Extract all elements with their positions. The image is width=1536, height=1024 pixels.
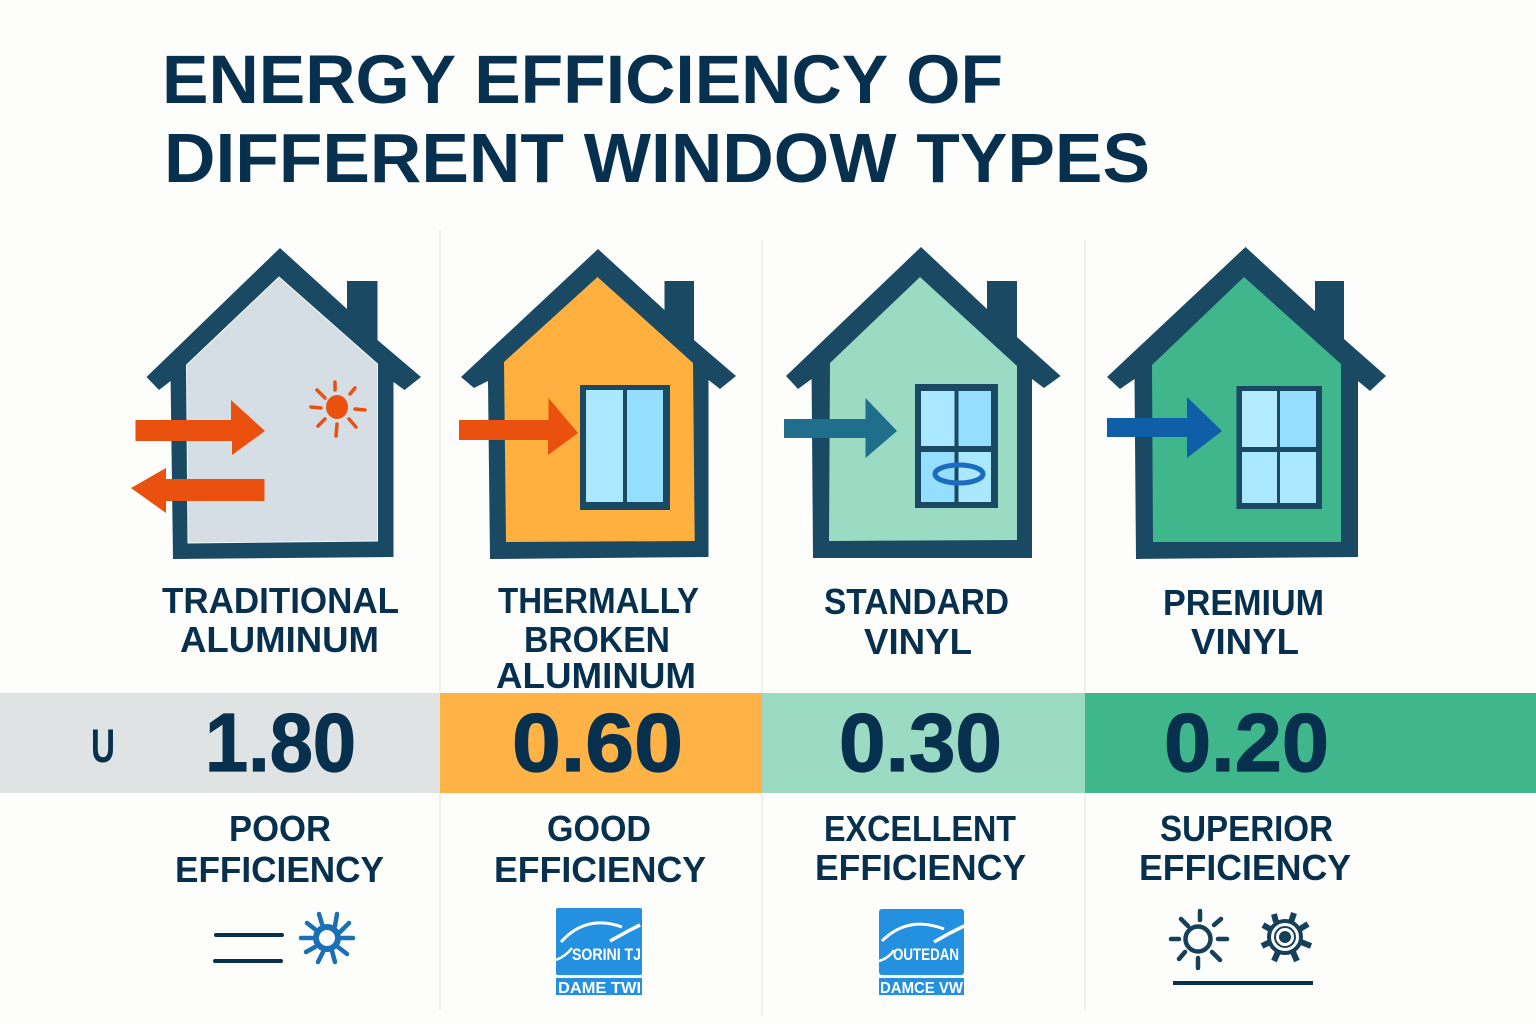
arrow: reduced heat (784, 398, 897, 458)
icon: efficiency badge one: DAME TWI (558, 980, 641, 997)
rating: good efficiency (494, 808, 706, 890)
panel: thermally broken aluminum (459, 249, 736, 559)
label: traditional aluminum: TRADITIONAL (162, 580, 399, 621)
label: traditional aluminum (162, 580, 399, 660)
arrow: heat in (136, 400, 265, 455)
label: thermally broken aluminum (496, 580, 699, 696)
label: premium vinyl (1163, 582, 1324, 662)
window: four pane (1236, 386, 1322, 509)
label: thermally broken aluminum: BROKEN (524, 619, 670, 660)
icon: efficiency badge one: SORINI TJ (572, 945, 641, 964)
rating: excellent efficiency: EFFICIENCY (815, 847, 1026, 888)
icon: blue sun (301, 914, 353, 962)
rating: excellent efficiency: EXCELLENT (824, 808, 1016, 849)
icon: gear sun (1262, 913, 1311, 961)
u label: U (91, 719, 115, 772)
label: standard vinyl: STANDARD (824, 581, 1009, 622)
window: double pane (580, 385, 670, 510)
title: DIFFERENT WINDOW TYPES (164, 119, 1150, 197)
icon: efficiency badge two: OUTEDAN (893, 945, 959, 964)
icon: efficiency badge two: DAMCE VW (880, 980, 964, 997)
rating: superior efficiency: EFFICIENCY (1139, 847, 1351, 888)
rating: good efficiency: EFFICIENCY (494, 849, 706, 890)
rating: poor efficiency: POOR (229, 808, 331, 849)
label: premium vinyl: PREMIUM (1163, 582, 1324, 623)
icon: sun (311, 382, 365, 436)
window: four pane with mark (915, 384, 998, 508)
rating: excellent efficiency (815, 808, 1026, 888)
house: traditional aluminum (146, 248, 421, 559)
u-value band (0, 693, 1536, 793)
icon: underline (1173, 981, 1313, 985)
house: premium vinyl (1107, 247, 1386, 559)
label: traditional aluminum: ALUMINUM (180, 619, 379, 660)
title (162, 41, 1150, 197)
label: thermally broken aluminum: ALUMINUM (496, 655, 696, 696)
arrow: low heat (1107, 397, 1222, 458)
icon: outline sun (1171, 911, 1227, 968)
arrow: heat out (131, 468, 264, 513)
icon: efficiency badge one (556, 908, 642, 997)
arrow: heat in (459, 398, 578, 455)
value: 0.20: 0.20 (1164, 696, 1329, 789)
panel: standard vinyl (784, 247, 1061, 558)
value: 0.60: 0.60 (512, 696, 683, 789)
label: thermally broken aluminum: THERMALLY (498, 580, 699, 621)
house: thermally broken aluminum (461, 249, 736, 559)
house: standard vinyl (786, 247, 1061, 558)
title: ENERGY EFFICIENCY OF (162, 41, 1003, 118)
label: premium vinyl: VINYL (1191, 621, 1299, 662)
icon: two lines (215, 935, 282, 961)
rating: good efficiency: GOOD (547, 808, 651, 849)
panel: traditional aluminum (131, 248, 421, 559)
rating: poor efficiency: EFFICIENCY (175, 849, 384, 890)
label: standard vinyl: VINYL (864, 621, 972, 662)
panel: premium vinyl (1107, 247, 1386, 559)
label: standard vinyl (824, 581, 1009, 662)
value: 1.80: 1.80 (205, 696, 356, 789)
rating: superior efficiency (1139, 808, 1351, 888)
icon: efficiency badge two (879, 909, 964, 997)
value: 0.30: 0.30 (839, 696, 1002, 789)
rating: poor efficiency (175, 808, 384, 890)
rating: superior efficiency: SUPERIOR (1160, 808, 1333, 849)
